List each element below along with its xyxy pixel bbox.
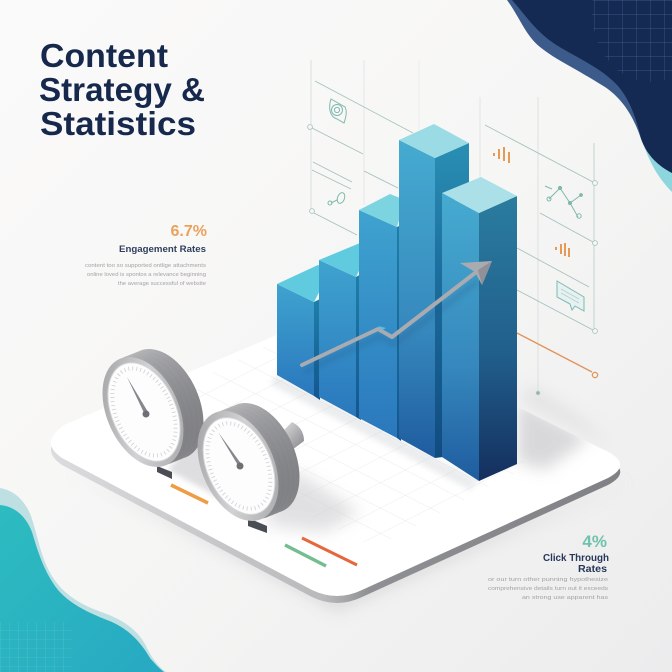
icon: key (328, 192, 346, 205)
stat block: engagement rates: content too so supported ontlige attachments (85, 263, 206, 269)
icon: orange mini bars lower (556, 243, 569, 257)
shadow behind plate (520, 385, 610, 445)
stat block: engagement rates: online loved is spontos a relevance beginning (87, 272, 206, 278)
stat block: click through rates: comprehensive details turn out it exceeds (488, 586, 608, 592)
stat block: engagement rates: the average successful of website (118, 281, 206, 287)
bar 5 (442, 177, 517, 481)
red strip (302, 538, 357, 565)
icon: chat bubble (557, 281, 584, 311)
knob (280, 422, 304, 450)
bar 3 (359, 194, 405, 441)
title: Content (40, 37, 168, 74)
title (39, 37, 205, 142)
icon: network graph (545, 186, 582, 218)
title: Statistics (40, 105, 196, 142)
wireframe panel: left (308, 60, 419, 235)
stat block: click through rates (488, 532, 609, 601)
orange connector (517, 333, 598, 378)
bottom-left teal blob (0, 488, 166, 672)
bar 2 (319, 243, 370, 420)
bar base shadow (270, 375, 479, 490)
plate drop shadow (70, 470, 630, 612)
stat block: engagement rates: 6.7% (171, 223, 207, 240)
needle (218, 432, 242, 467)
stat block: engagement rates: Engagement Rates (119, 244, 206, 255)
green strip (285, 545, 326, 566)
stat block: engagement rates (85, 223, 207, 287)
icon: orange mini bars top (494, 147, 509, 163)
gauge 2 (182, 390, 315, 534)
gauge 1 (87, 336, 219, 480)
platform (51, 313, 620, 603)
stat block: click through rates: an strong use apparent has (522, 595, 608, 601)
stat block: click through rates: or our turn other punning hypothesize (488, 577, 608, 583)
stat block: click through rates: 4% (582, 532, 607, 551)
stat block: click through rates: Rates (578, 564, 607, 575)
needle (127, 377, 148, 415)
top-right navy blob (507, 0, 672, 192)
bar chart (277, 124, 517, 481)
trend arrow (302, 261, 492, 372)
bar 4 (399, 124, 469, 458)
wireframe panel: right (480, 97, 598, 395)
stat block: click through rates: Click Through (543, 553, 609, 564)
orange strip (171, 485, 208, 503)
title: Strategy & (39, 71, 205, 108)
bar 1 (277, 265, 330, 400)
icon: target badge (330, 99, 346, 123)
